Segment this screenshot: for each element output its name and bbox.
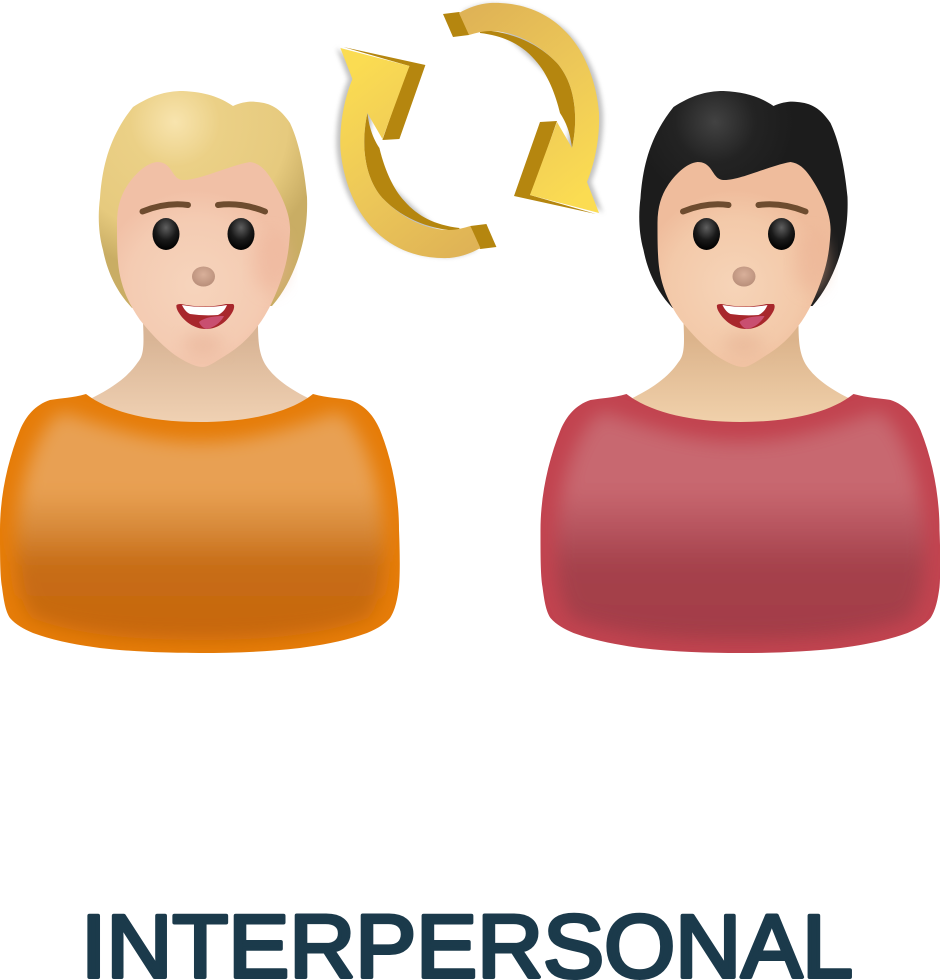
neck [92, 322, 308, 430]
chin shading [183, 333, 223, 357]
red top [540, 394, 940, 653]
person: left, blond in orange top [0, 91, 400, 653]
arrow: top right, pointing down [443, 3, 603, 214]
cheek shading [253, 232, 287, 292]
person: right, dark hair in red top [540, 91, 940, 653]
eyebrows [683, 204, 806, 212]
hair [639, 91, 848, 308]
mouth [176, 304, 234, 329]
orange top [0, 394, 400, 653]
eyebrows [142, 204, 265, 212]
nose [192, 266, 215, 286]
neck [632, 322, 848, 430]
eyes [693, 218, 795, 250]
icon: circular exchange arrows [336, 3, 603, 258]
nose [732, 266, 756, 286]
face [658, 162, 831, 367]
eyes [152, 218, 254, 250]
arrow: bottom left, pointing up [336, 47, 496, 258]
chin shading [724, 333, 764, 357]
face [117, 162, 290, 367]
mouth [717, 304, 775, 329]
hair [99, 91, 307, 308]
cheek shading [794, 232, 828, 292]
